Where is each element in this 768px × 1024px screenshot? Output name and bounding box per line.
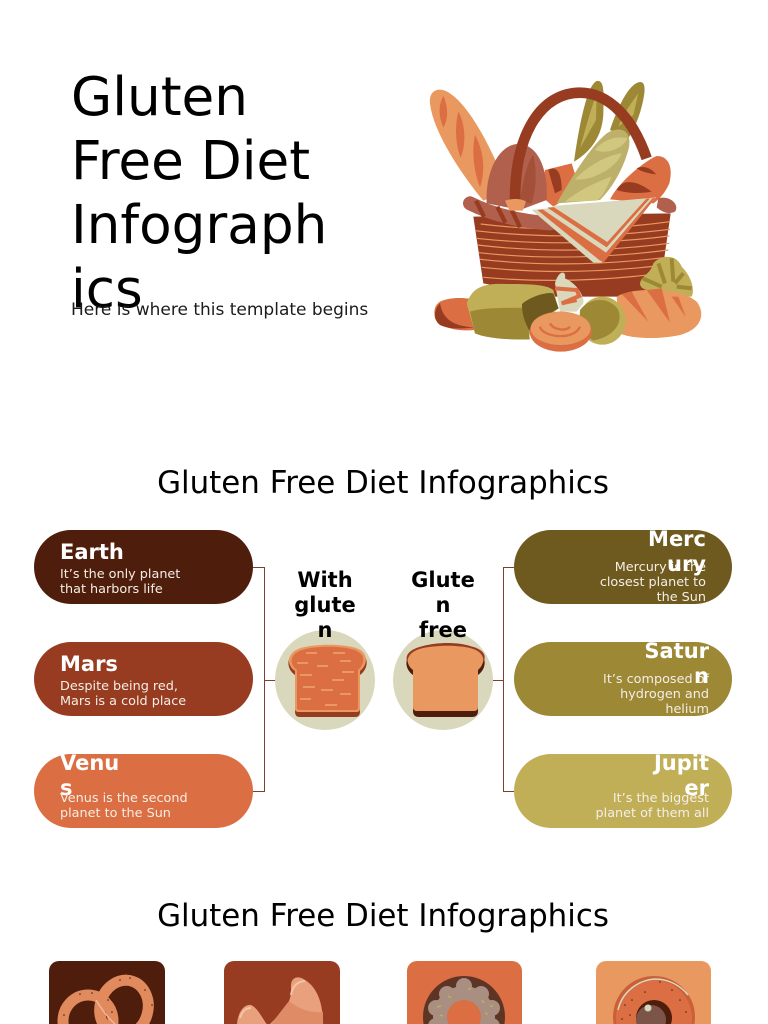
pill: Mercury: ury <box>667 552 706 576</box>
label: with gluten <box>294 568 356 642</box>
pill: Mercury: closest planet to <box>600 575 706 590</box>
title: Free Diet <box>71 130 310 192</box>
connector lines <box>253 568 514 792</box>
pill: Mercury: Mercury is the <box>615 560 706 575</box>
pill: Mars: Mars <box>60 652 118 676</box>
card: donut <box>407 961 522 1024</box>
pill: Jupiter: er <box>684 776 710 800</box>
label: with gluten: With <box>297 568 353 592</box>
pill: Mars: Despite being red, <box>60 679 178 694</box>
pill: Mercury <box>514 527 732 605</box>
title: Infograph <box>71 194 327 256</box>
pill: Mercury: Merc <box>648 527 706 551</box>
pill: Earth <box>34 530 253 604</box>
title: ics <box>71 258 143 320</box>
pill: Mars <box>34 642 253 716</box>
pill: Mars: Mars is a cold place <box>60 694 186 709</box>
pill: Venus <box>34 751 253 828</box>
pill: Venus: Venu <box>60 751 119 775</box>
pill: Jupiter: planet of them all <box>596 806 709 821</box>
illustration: bread basket <box>430 81 701 352</box>
heading: section two: Gluten Free Diet Infographics <box>157 898 609 934</box>
pill: Venus: s <box>60 776 72 800</box>
label: with gluten: n <box>318 618 332 642</box>
pill: Earth: Earth <box>60 540 124 564</box>
pill: Venus: Venus is the second <box>60 791 188 806</box>
pill: Earth: that harbors life <box>60 582 163 597</box>
pill: Jupiter: Jupit <box>652 751 709 775</box>
pill: Saturn: n <box>694 664 709 688</box>
label: gluten free <box>411 568 475 642</box>
pill: Saturn: It’s composed of <box>603 672 709 687</box>
pill: Saturn: Satur <box>644 639 710 663</box>
pill: Mercury: the Sun <box>657 590 706 605</box>
title: Gluten <box>71 66 248 128</box>
heading: section one: Gluten Free Diet Infographics <box>157 465 609 501</box>
card: bagel <box>596 961 711 1024</box>
pill: Earth: It’s the only planet <box>60 567 180 582</box>
label: gluten free: n <box>436 593 450 617</box>
label: with gluten: glute <box>294 593 356 617</box>
pill: Saturn: hydrogen and <box>620 687 709 702</box>
pill: Jupiter <box>514 751 732 828</box>
label: gluten free: free <box>419 618 467 642</box>
card: croissant <box>224 961 340 1024</box>
subtitle: Here is where this template begins <box>71 300 368 320</box>
icon: gluten free toast <box>393 630 493 730</box>
pill: Venus: planet to the Sun <box>60 806 171 821</box>
title <box>71 66 327 320</box>
card: pretzel <box>49 961 165 1024</box>
pill: Saturn <box>514 639 732 717</box>
pill: Saturn: helium <box>665 702 709 717</box>
icon: toast with gluten <box>275 630 375 730</box>
label: gluten free: Glute <box>411 568 475 592</box>
pill: Jupiter: It’s the biggest <box>613 791 709 806</box>
